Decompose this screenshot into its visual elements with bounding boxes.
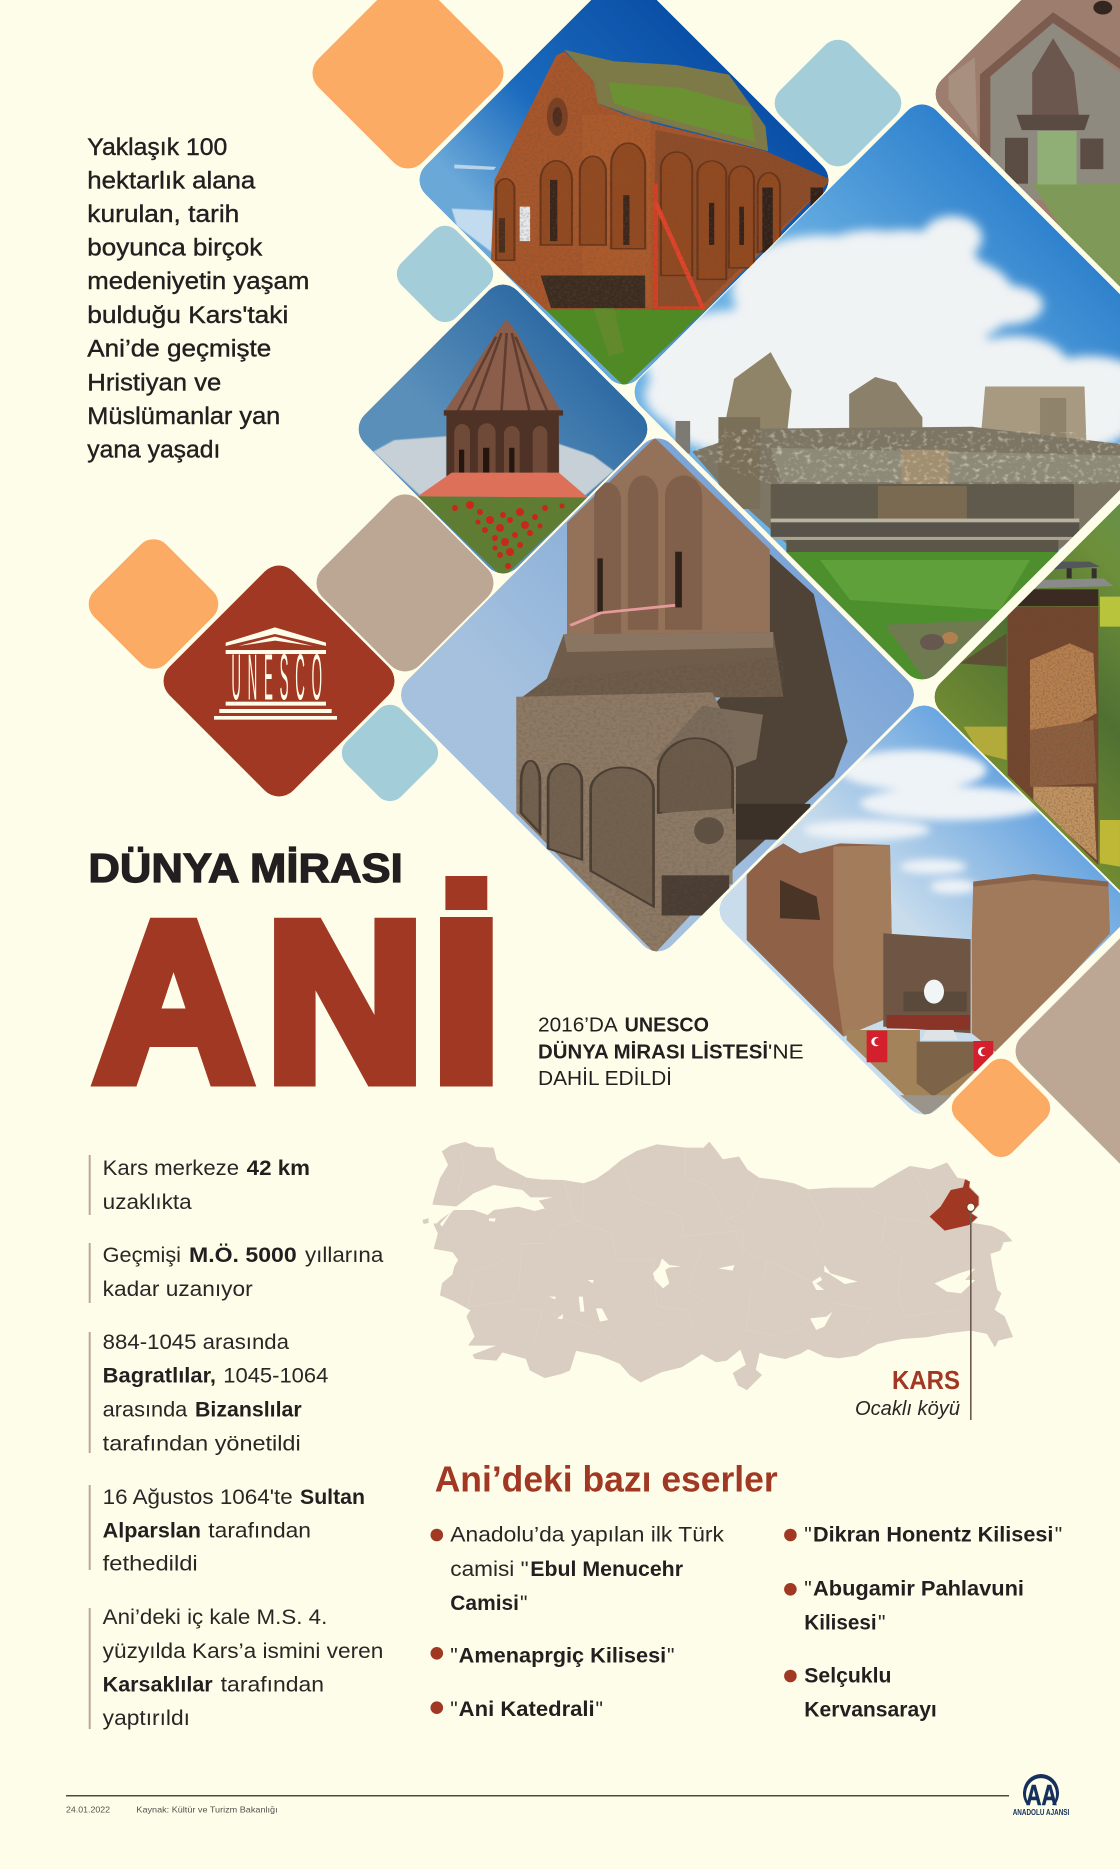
fact: conquest: tarafından [208,1520,311,1542]
heading: Ani: N [266,875,424,1127]
heading: Ani: A [95,875,252,1127]
heading: Ani'deki bazı eserler: Ani’deki bazı eserler [435,1459,778,1500]
Kars province [930,1179,979,1231]
subtitle: UNESCO listing [538,1015,804,1090]
item: Ebul Menucehr [430,1524,724,1615]
fact: rulers [89,1331,329,1456]
icon: Anadolu Ajansı logo [1013,1774,1069,1817]
label: Kars, Ocaklı köyü: KARS [892,1365,960,1395]
intro text block: Hristiyan ve [87,370,221,396]
photo: conical church with poppies [358,284,648,574]
item: Abugamir Pahlavuni: " [878,1611,885,1634]
intro text block: Ani’de geçmişte [87,336,271,363]
photo: ruins under clouds [626,96,1120,690]
facts list [89,1155,384,1730]
intro text block: Müslümanlar yan [87,403,280,430]
icon: Anadolu Ajansı logo: ANADOLU AJANSI [1013,1807,1069,1817]
intro text block: hektarlık alana [87,168,256,194]
map pointer: Kars [967,1203,975,1420]
fact: distance: Kars merkeze [103,1157,239,1180]
subtitle: UNESCO listing: DÜNYA MİRASI LİSTESİ [538,1040,768,1063]
fact: citadel [89,1606,383,1730]
fact: citadel: Karsaklılar [103,1674,213,1697]
diamond: tan bottom right [1007,845,1120,1257]
fact: conquest [89,1485,365,1576]
item: Dikran Honentz: " [804,1524,812,1547]
intro text block [87,134,309,464]
diamond: UNESCO emblem [155,557,403,805]
icon: UNESCO temple logo: UNESCO [231,640,322,713]
fact: conquest: Alparslan [103,1520,201,1542]
fact: distance: 42 km [247,1157,310,1180]
intro text block: kurulan, tarih [87,201,239,228]
subtitle: UNESCO listing: DAHİL EDİLDİ [538,1067,672,1090]
diamond: tan [308,486,502,680]
diamond: orange top [304,0,512,177]
intro text block: boyunca birçok [87,234,263,262]
fact: conquest: 16 Ağustos 1064'te [103,1486,293,1509]
fact: history: M.Ö. 5000 [189,1244,297,1267]
item: Amenaprgiç: " [450,1644,458,1667]
icon: Anadolu Ajansı logo: AA [1026,1780,1057,1812]
fact: distance [89,1155,310,1215]
fact: conquest: fethedildi [103,1553,198,1576]
item: Ebul Menucehr: camisi " [450,1558,529,1581]
footer rule and source [66,1795,1009,1815]
item: Ani Katedrali: Ani Katedrali [459,1698,595,1721]
item: Amenaprgiç: Amenaprgiç Kilisesi [459,1644,666,1667]
heading: Dünya Mirası: DÜNYA MİRASI [88,845,403,891]
heading: Ani: İ [436,875,496,1127]
fact: distance: uzaklıkta [103,1191,192,1214]
fact: history: kadar uzanıyor [103,1278,253,1301]
footer rule and source: 24.01.2022 [66,1805,110,1815]
item: Dikran Honentz: Dikran Honentz Kilisesi [813,1524,1053,1547]
diamond: light blue top [767,32,909,174]
item: Amenaprgiç: " [667,1644,674,1667]
photo: Ani cathedral [411,0,837,393]
item: Abugamir Pahlavuni: " [804,1578,812,1601]
photo: ruined church tower [393,430,922,960]
item: Ebul Menucehr: " [520,1592,527,1615]
diamond: light blue lower [335,698,445,808]
fact: citadel: yüzyılda Kars’a ismini veren [103,1640,383,1663]
subtitle: UNESCO listing: 'NE [768,1041,804,1063]
diamond: orange bottom [945,1052,1057,1164]
label: Kars, Ocaklı köyü [855,1365,960,1420]
icon: UNESCO temple logo [214,627,337,720]
photo: brick minaret [926,491,1120,903]
fact: citadel: Ani’deki iç kale M.S. 4. [103,1606,327,1629]
footer rule and source: Kaynak: Kültür ve Turizm Bakanlığı [136,1805,278,1815]
fact: history: Geçmişi [103,1244,181,1267]
item: Ani Katedrali: " [450,1698,458,1721]
item: Selçuklu Kervansarayı: Selçuklu [804,1664,891,1687]
fact: conquest: Sultan [300,1486,365,1509]
photo: castle with flags [711,697,1120,1123]
fact: rulers: 1045-1064 [223,1365,329,1388]
fact: citadel: yaptırıldı [103,1707,190,1730]
monuments list [430,1524,1062,1722]
item: Abugamir Pahlavuni: Kilisesi [804,1611,877,1634]
fact: rulers: 884-1045 arasında [103,1331,289,1354]
photo: carved portal [927,0,1120,300]
clouds [644,216,1120,470]
intro text block: bulduğu Kars'taki [87,302,288,329]
subtitle: UNESCO listing: UNESCO [625,1015,709,1037]
subtitle: UNESCO listing: 2016’DA [538,1015,618,1037]
fact: history [89,1243,384,1303]
fact: rulers: Bizanslılar [195,1399,302,1422]
fact: history: yıllarına [305,1244,384,1267]
item: Ebul Menucehr: Ebul Menucehr [530,1558,683,1581]
intro text block: medeniyetin yaşam [87,268,309,295]
lakes and seas [429,1185,975,1330]
label: Kars, Ocaklı köyü: Ocaklı köyü [855,1398,960,1420]
map: Turkey [422,1143,1012,1389]
item: Selçuklu Kervansarayı: Kervansarayı [804,1699,937,1722]
item: Ebul Menucehr: Anadolu’da yapılan ilk Türk [450,1524,724,1547]
item: Ani Katedrali: " [596,1698,603,1721]
item: Selçuklu Kervansarayı [784,1664,937,1722]
fact: rulers: tarafından yönetildi [103,1433,301,1456]
item: Dikran Honentz: " [1055,1524,1062,1547]
intro text block: Yaklaşık 100 [87,134,227,161]
diamond: light blue middle [390,219,500,329]
fact: rulers: arasında [103,1399,188,1422]
diamond: orange left [81,532,226,676]
item: Abugamir Pahlavuni: Abugamir Pahlavuni [813,1578,1024,1601]
fact: citadel: tarafından [221,1674,324,1697]
grass [786,552,1058,680]
item: Ebul Menucehr: Camisi [450,1592,519,1615]
heading: Ani [95,866,496,1127]
fact: rulers: Bagratlılar, [103,1365,216,1388]
item: Abugamir Pahlavuni [784,1578,1024,1634]
intro text block: yana yaşadı [87,437,220,464]
